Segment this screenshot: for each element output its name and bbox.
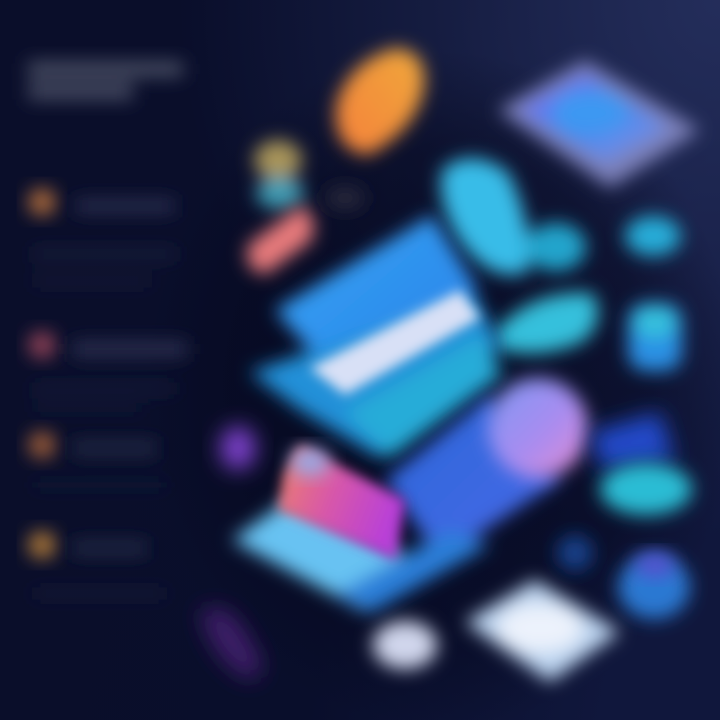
small blue dot: [557, 535, 593, 571]
pale corner of card: [290, 448, 330, 476]
title block: [28, 62, 183, 100]
small colored stack top left: [254, 140, 304, 209]
gradient orb: [488, 378, 588, 478]
tablet top right: [498, 60, 700, 188]
bullet icon 2: [28, 331, 56, 359]
teal ellipse: [600, 463, 692, 515]
dark halo behind illustration: [140, 50, 720, 720]
list item 2: [28, 331, 187, 411]
bullet icon 3: [28, 431, 56, 459]
list item 1 text: [32, 200, 177, 285]
right side icons: [625, 216, 682, 371]
cyan leaf shapes: [441, 158, 598, 353]
white bar: [310, 290, 480, 395]
bullet icon 4: [28, 531, 56, 559]
orange blob: [336, 48, 424, 155]
list item 4 text: [32, 542, 167, 597]
laptop lower: [232, 395, 560, 612]
blue chip: [590, 412, 675, 468]
white tile small: [373, 621, 437, 669]
list item 3: [28, 431, 167, 488]
dim purple shape: [200, 608, 261, 680]
dark faint icon: [325, 186, 365, 210]
purple gem: [220, 426, 256, 470]
blue sphere: [618, 555, 690, 619]
list item 4: [28, 531, 167, 597]
laptop upper: [250, 215, 502, 458]
list item 2 text: [32, 342, 187, 411]
white tile large: [465, 580, 620, 682]
pink gradient card: [278, 445, 405, 560]
list item 1: [28, 188, 177, 285]
coral card: [247, 206, 314, 274]
bullet icon 1: [28, 188, 56, 216]
list item 3 text: [32, 442, 167, 488]
